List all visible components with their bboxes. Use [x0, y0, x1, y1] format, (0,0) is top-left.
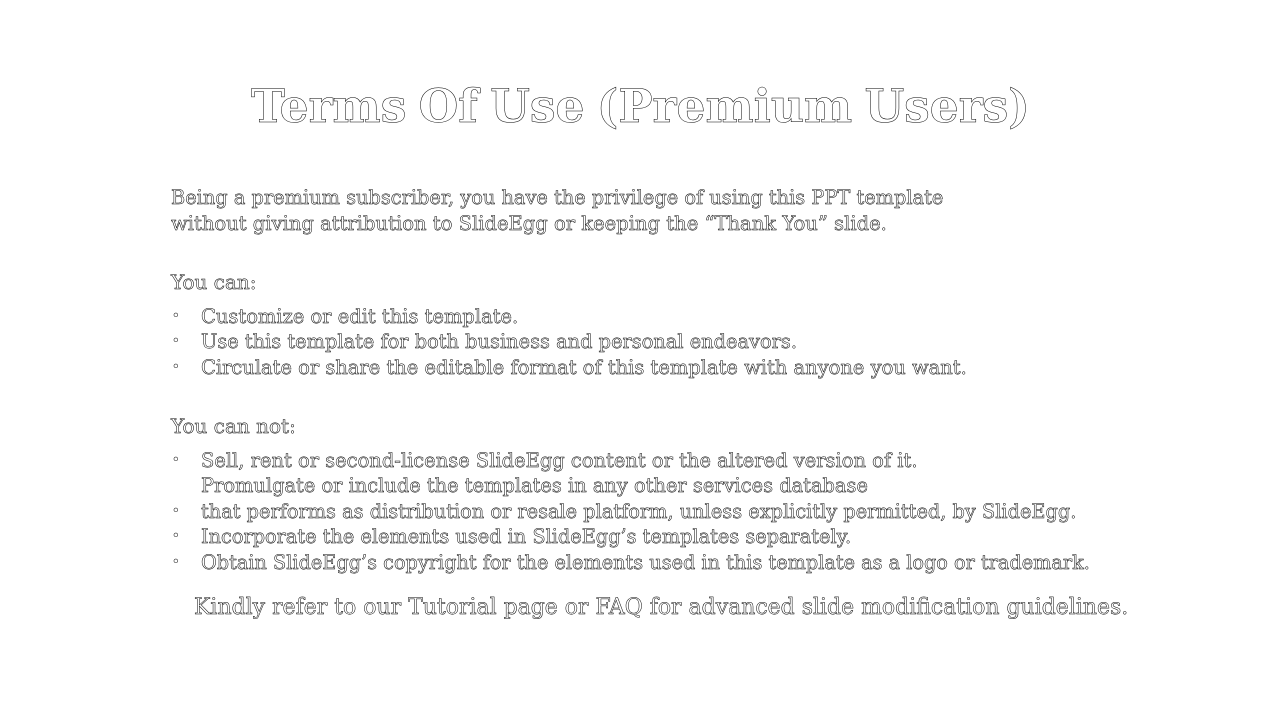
list: you can: Use this template for both business and personal endeavors. — [201, 330, 797, 353]
list: you can: • — [172, 360, 180, 375]
heading: you can not: You can not: — [171, 414, 296, 438]
footer note: Kindly refer to our Tutorial page or FAQ for advanced slide modification guidelines. — [194, 595, 1128, 620]
list: you can not: Incorporate the elements used in SlideEgg’s templates separately. — [201, 525, 851, 548]
list: you can: Customize or edit this template. — [201, 305, 518, 328]
list: you can not: • — [172, 453, 180, 468]
list: you can not: • — [172, 504, 180, 519]
list: you can not: Obtain SlideEgg’s copyright for the elements used in this template as a logo or trademark. — [201, 551, 1090, 574]
intro text — [171, 186, 943, 235]
text: Being a premium subscriber, you have the privilege of using this PPT template — [171, 186, 943, 209]
list: you can — [172, 305, 967, 379]
list: you can not: Sell, rent or second-license SlideEgg content or the altered version of it. — [201, 449, 918, 472]
text: without giving attribution to SlideEgg or keeping the “Thank You” slide. — [171, 212, 887, 235]
list: you can: Circulate or share the editable format of this template with anyone you want. — [201, 356, 967, 379]
list: you can not — [172, 449, 1090, 574]
title: Terms Of Use (Premium Users) — [251, 79, 1030, 133]
list: you can not: that performs as distribution or resale platform, unless explicitly permitted, by SlideEgg. — [201, 500, 1076, 523]
list: you can not: Promulgate or include the templates in any other services database — [201, 474, 868, 497]
list: you can not: • — [172, 529, 180, 544]
list: you can: • — [172, 334, 180, 349]
list: you can not: • — [172, 555, 180, 570]
heading: you can: You can: — [171, 270, 256, 294]
list: you can: • — [172, 309, 180, 324]
